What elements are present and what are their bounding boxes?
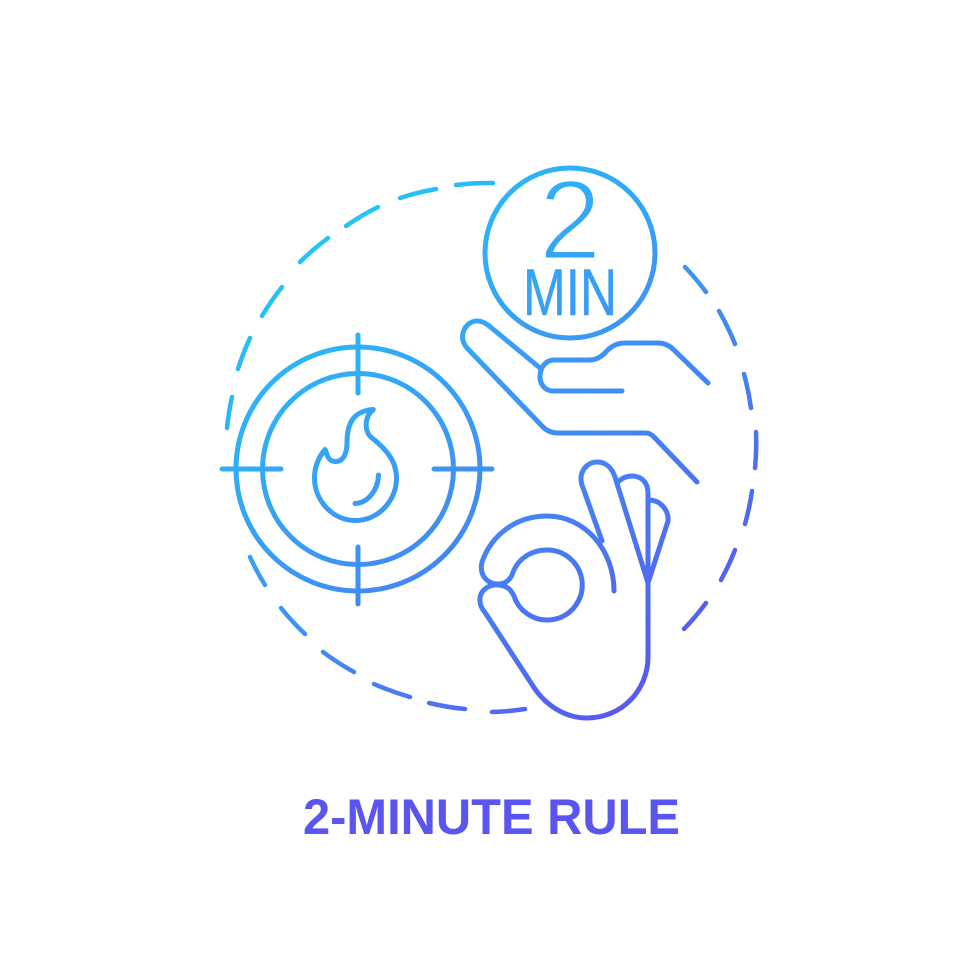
numeral 2: 2 [539,157,601,283]
crosshair [222,335,492,604]
badge: 2 min [485,157,655,338]
icon: target with flame [222,335,492,604]
icon: open hand [463,321,708,482]
title: 2-MINUTE RULE [303,789,680,845]
icon: OK gesture hand [480,462,668,718]
dashed circle ring [227,183,756,712]
target rings [236,347,480,591]
icon: flame [314,410,396,520]
badge circle [485,168,655,338]
label MIN: MIN [523,255,617,329]
